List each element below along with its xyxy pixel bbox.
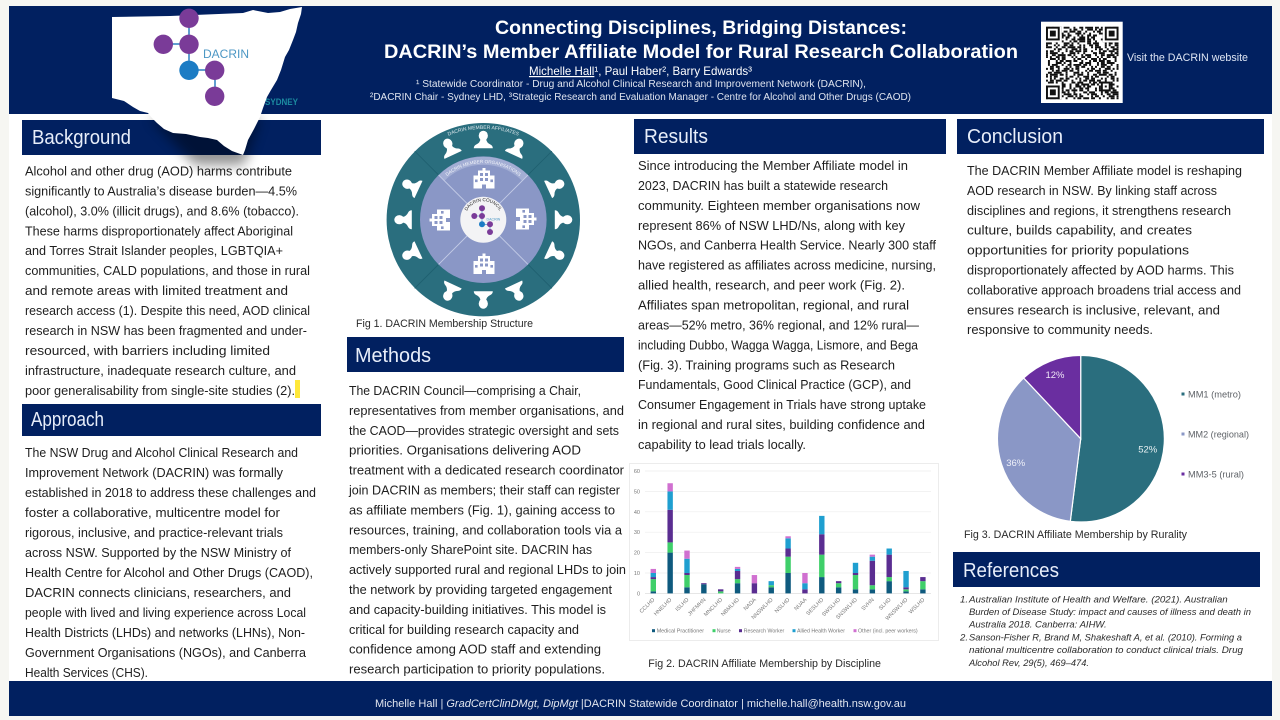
chart category labels: NUAA bbox=[793, 597, 809, 612]
methods body text: treatment with a dedicated research coordinator bbox=[349, 463, 625, 478]
centre: DACRIN council bbox=[460, 197, 506, 243]
results body text: have registered as affiliates across medicine, nursing, bbox=[638, 258, 936, 273]
approach body text: people with lived and living experience across Local bbox=[25, 605, 306, 620]
stacked bar chart: membership by discipline: 50 bbox=[634, 489, 640, 495]
background body text: and Torres Strait Islander peoples, LGBTQIA+ bbox=[25, 243, 283, 258]
chart category labels: NADA bbox=[743, 597, 758, 612]
header banner bbox=[9, 6, 1272, 114]
methods body text: actively supported rural and regional LHDs to join bbox=[349, 562, 626, 577]
logo nodes bbox=[154, 9, 224, 106]
methods body text: critical for building research capacity and bbox=[349, 622, 579, 637]
approach body text: Government Organisations (NGOs), and Canberra bbox=[25, 645, 307, 660]
background body text: resourced, with barriers including limited bbox=[25, 343, 270, 358]
stacked bar chart: membership by discipline: 20 bbox=[634, 551, 640, 557]
chart legend bbox=[652, 629, 918, 635]
results body text: community. Eighteen member organisations now bbox=[638, 198, 921, 213]
pie chart: membership by rurality bbox=[997, 355, 1249, 522]
conclusion body text: disciplines and regions, it strengthens research bbox=[967, 203, 1231, 218]
background body text: (alcohol), 3.0% (illicit drugs), and 8.6% (tobacco). bbox=[25, 203, 299, 218]
results body text: allied health, research, and peer work (Fig. 2). bbox=[638, 278, 905, 293]
chart category labels: SWSLHD bbox=[821, 597, 842, 618]
methods body text: and capacity-building initiatives. This model is bbox=[349, 602, 606, 617]
panel heading: approach bbox=[22, 404, 321, 436]
results body text: Affiliates span metropolitan, regional, and rural bbox=[638, 298, 909, 312]
conclusion body text: AOD research in NSW. By linking staff across bbox=[967, 183, 1217, 198]
reference list: Sanson-Fisher R, Brand M, Shakeshaft A, et al. (2010). Forming a bbox=[969, 632, 1242, 644]
chart legend: Medical Practitioner bbox=[657, 629, 704, 635]
panel heading: conclusion: Conclusion bbox=[967, 126, 1063, 148]
results body text: Consumer Engagement in Trials have strong uptake bbox=[638, 397, 926, 412]
authors and affiliations: Michelle Hall¹, Paul Haber², Barry Edwards³ bbox=[529, 64, 752, 78]
panel heading: results bbox=[634, 119, 946, 154]
background body text: communities, CALD populations, and those in rural bbox=[25, 263, 310, 278]
panel heading: approach: Approach bbox=[31, 409, 104, 431]
pie legend: MM2 (regional) bbox=[1188, 430, 1249, 440]
chart category labels: NBMLHD bbox=[720, 597, 741, 618]
stacked bar chart: membership by discipline: 60 bbox=[634, 469, 640, 475]
reference list: Australia 2018. Canberra: AIHW. bbox=[968, 620, 1107, 631]
methods body text: priorities. Organisations delivering AOD bbox=[349, 443, 581, 458]
figure 3 caption: Fig 3. DACRIN Affiliate Membership by Rurality bbox=[964, 529, 1187, 541]
chart legend: Allied Health Worker bbox=[797, 629, 845, 635]
stacked bar chart: membership by discipline: 10 bbox=[634, 571, 640, 577]
methods body text: confidence among AOD staff and extending bbox=[349, 642, 601, 657]
text highlight bbox=[295, 380, 300, 398]
panel heading: background: Background bbox=[32, 127, 131, 149]
conclusion body text: culture, builds capability, and creates bbox=[967, 223, 1193, 238]
authors and affiliations bbox=[370, 64, 911, 103]
organisation building icons bbox=[474, 168, 494, 188]
chart category labels bbox=[639, 597, 926, 622]
chart category labels: SESLHD bbox=[805, 597, 825, 617]
poster title: Connecting Disciplines, Bridging Distances: bbox=[495, 17, 907, 39]
reference list: Australian Institute of Health and Welfare. (2021). Australian bbox=[968, 594, 1228, 606]
results body text: Since introducing the Member Affiliate model in bbox=[638, 158, 908, 173]
results body text: capability to lead trials locally. bbox=[638, 437, 806, 452]
conclusion body text: ensures research is inclusive, relevant, and bbox=[967, 302, 1220, 317]
methods body text: the CAOD—provides strategic oversight and sets bbox=[349, 423, 619, 438]
results body text: 2023, DACRIN has built a statewide research bbox=[638, 178, 888, 193]
background body text: significantly to Australia’s disease burden—4.5% bbox=[25, 183, 297, 198]
poster title: DACRIN’s Member Affiliate Model for Rural Research Collaboration bbox=[384, 41, 1018, 63]
background body text: These harms disproportionately affect Aboriginal bbox=[25, 223, 293, 238]
methods body text: representatives from member organisations, and bbox=[349, 403, 624, 418]
results body text: areas—52% metro, 36% regional, and 12% rural— bbox=[638, 317, 919, 332]
methods body text: members-only SharePoint site. DACRIN has bbox=[349, 542, 592, 557]
approach body text: established in 2018 to address these challenges and bbox=[25, 485, 316, 500]
methods body text bbox=[348, 383, 626, 677]
chart category labels: CCLHD bbox=[639, 597, 656, 615]
chart category labels: JHFMHN bbox=[687, 597, 707, 617]
chart category labels: SVHN bbox=[861, 597, 876, 612]
membership structure diagram: DACRIN bbox=[486, 218, 501, 222]
background body text: research access (1). Despite this need, AOD clinical bbox=[25, 303, 310, 318]
background body text: research in NSW has been fragmented and under- bbox=[25, 323, 307, 338]
background body text: infrastructure, inadequate research culture, and bbox=[25, 363, 296, 378]
chart legend: Nurse bbox=[717, 629, 731, 635]
chart category labels: SNSWLHD bbox=[835, 597, 859, 621]
chart bars bbox=[651, 483, 926, 593]
membership structure diagram: DACRIN MEMBER ORGANISATIONS bbox=[446, 160, 521, 176]
chart category labels: NNSWLHD bbox=[751, 597, 775, 621]
methods body text: research participation to priority populations. bbox=[349, 662, 605, 677]
approach body text: foster a collaborative, multicentre model for bbox=[25, 505, 281, 520]
background body text: and remote areas with limited treatment and bbox=[25, 283, 288, 298]
methods body text: as affiliate members (Fig. 1), gaining access to bbox=[349, 502, 615, 517]
reference list: Burden of Disease Study: impact and causes of illness and death in bbox=[969, 607, 1251, 618]
approach body text: Health Districts (LHDs) and networks (LHNs), Non- bbox=[25, 625, 305, 640]
results body text: represent 86% of NSW LHD/Ns, along with key bbox=[638, 218, 905, 233]
approach body text bbox=[25, 445, 316, 680]
results body text: Fundamentals, Good Clinical Practice (GCP), and bbox=[638, 377, 911, 392]
sydney logo text: SYDNEY bbox=[265, 97, 298, 107]
approach body text: The NSW Drug and Alcohol Clinical Research and bbox=[25, 445, 298, 460]
results body text bbox=[638, 158, 936, 452]
panel heading: references: References bbox=[963, 560, 1059, 582]
methods body text: join DACRIN as members; their staff can register bbox=[348, 482, 621, 498]
panel heading: background bbox=[22, 120, 321, 155]
conclusion body text: opportunities for priority populations bbox=[967, 243, 1190, 258]
approach body text: rigorous, inclusive, and practice-relevant trials bbox=[25, 525, 283, 540]
pie chart: membership by rurality: 12% bbox=[1045, 370, 1065, 381]
NSW map shape bbox=[112, 7, 302, 155]
reference list: 1. bbox=[960, 594, 968, 606]
reference list: national multicentre collaboration to conduct clinical trials. Drug bbox=[969, 645, 1244, 656]
chart legend: Research Worker bbox=[744, 629, 784, 635]
chart category labels: WSLHD bbox=[908, 597, 926, 615]
approach body text: Improvement Network (DACRIN) was formally bbox=[25, 465, 283, 480]
QR code bbox=[1041, 22, 1123, 103]
methods body text: The DACRIN Council—comprising a Chair, bbox=[349, 383, 581, 398]
conclusion body text: The DACRIN Member Affiliate model is reshaping bbox=[967, 163, 1242, 178]
approach body text: Health Centre for Alcohol and Other Drugs (CAOD), bbox=[25, 565, 313, 580]
poster title bbox=[384, 17, 1018, 63]
stacked bar chart: membership by discipline: 30 bbox=[634, 530, 640, 536]
background body text: Alcohol and other drug (AOD) harms contribute bbox=[25, 163, 292, 178]
chart category labels: ISLHD bbox=[675, 597, 690, 613]
map shadow bbox=[150, 118, 260, 165]
chart category labels: WNSWLHD bbox=[885, 597, 909, 622]
conclusion body text: disproportionately affected by AOD harms. This bbox=[967, 262, 1234, 278]
authors and affiliations: ¹ Statewide Coordinator - Drug and Alcohol Clinical Research and Improvement Network (DACRIN), bbox=[416, 79, 866, 90]
chart category labels: SLHD bbox=[878, 597, 893, 612]
reference list: Alcohol Rev, 29(5), 469–474. bbox=[968, 658, 1089, 669]
logo connectors bbox=[163, 18, 215, 96]
stacked bar chart: membership by discipline: 0 bbox=[637, 591, 640, 597]
logo wordmark: DACRIN bbox=[203, 49, 249, 61]
stacked bar chart: membership by discipline bbox=[630, 464, 938, 640]
footer contact line: Michelle Hall | GradCertClinDMgt, DipMgt |DACRIN Statewide Coordinator | michelle.hall@health.nsw.gov.au bbox=[375, 698, 906, 710]
conclusion body text: responsive to community needs. bbox=[967, 322, 1153, 337]
outer ring: member affiliates bbox=[387, 123, 580, 316]
results body text: including Dubbo, Wagga Wagga, Lismore, and Bega bbox=[638, 337, 919, 352]
figure 1 caption: Fig 1. DACRIN Membership Structure bbox=[356, 318, 533, 330]
panel heading: references bbox=[953, 552, 1260, 587]
footer banner bbox=[9, 681, 1272, 716]
approach body text: Health Services (CHS). bbox=[25, 665, 148, 680]
DACRIN logo on NSW map bbox=[112, 7, 302, 155]
reference list bbox=[959, 594, 1251, 669]
chart gridlines and y axis bbox=[645, 471, 931, 593]
methods body text: resources, training, and collaboration tools via a bbox=[349, 522, 623, 537]
pie chart: membership by rurality: 36% bbox=[1006, 458, 1026, 469]
panel heading: methods: Methods bbox=[355, 345, 431, 367]
website label: Visit the DACRIN website bbox=[1127, 52, 1248, 64]
results body text: in regional and rural sites, building confidence and bbox=[638, 417, 925, 432]
pie legend: MM3-5 (rural) bbox=[1188, 470, 1244, 480]
methods body text: the network by providing targeted engagement bbox=[349, 582, 612, 597]
conclusion body text bbox=[967, 163, 1242, 337]
reference list: 2. bbox=[959, 632, 968, 644]
panel heading: methods bbox=[347, 337, 624, 372]
pie slice values: 52% bbox=[1138, 444, 1158, 456]
figure 2 caption: Fig 2. DACRIN Affiliate Membership by Discipline bbox=[648, 658, 881, 670]
membership structure diagram: DACRIN COUNCIL bbox=[464, 198, 502, 211]
membership structure diagram: DACRIN MEMBER AFFILIATES bbox=[448, 125, 519, 136]
panel heading: results: Results bbox=[644, 126, 708, 148]
approach body text: across NSW. Supported by the NSW Ministry of bbox=[25, 545, 291, 560]
membership structure diagram bbox=[386, 123, 580, 316]
pie legend bbox=[1182, 390, 1249, 480]
chart category labels: HNELHD bbox=[653, 597, 673, 617]
affiliate person icons bbox=[394, 131, 572, 309]
chart category labels: NSLHD bbox=[774, 597, 791, 615]
results body text: NGOs, and Canberra Health Service. Nearly 300 staff bbox=[638, 238, 936, 253]
stacked bar chart: membership by discipline: 40 bbox=[634, 510, 640, 516]
authors and affiliations: ²DACRIN Chair - Sydney LHD, ³Strategic Research and Evaluation Manager - Centre for Alcohol and Other Drugs (CAOD) bbox=[370, 92, 911, 103]
chart category labels: MNCLHD bbox=[703, 597, 724, 618]
pie legend: MM1 (metro) bbox=[1188, 390, 1241, 400]
results body text: (Fig. 3). Training programs such as Research bbox=[638, 357, 895, 372]
conclusion body text: collaborative approach broadens trial access and bbox=[967, 282, 1241, 297]
approach body text: DACRIN connects clinicians, researchers, and bbox=[25, 585, 291, 600]
background body text bbox=[25, 163, 310, 398]
background body text: poor generalisability from single-site studies (2). bbox=[25, 383, 295, 398]
chart legend: Other (incl. peer workers) bbox=[858, 629, 918, 635]
panel heading: conclusion bbox=[957, 119, 1264, 154]
middle ring: member organisations bbox=[420, 156, 547, 283]
